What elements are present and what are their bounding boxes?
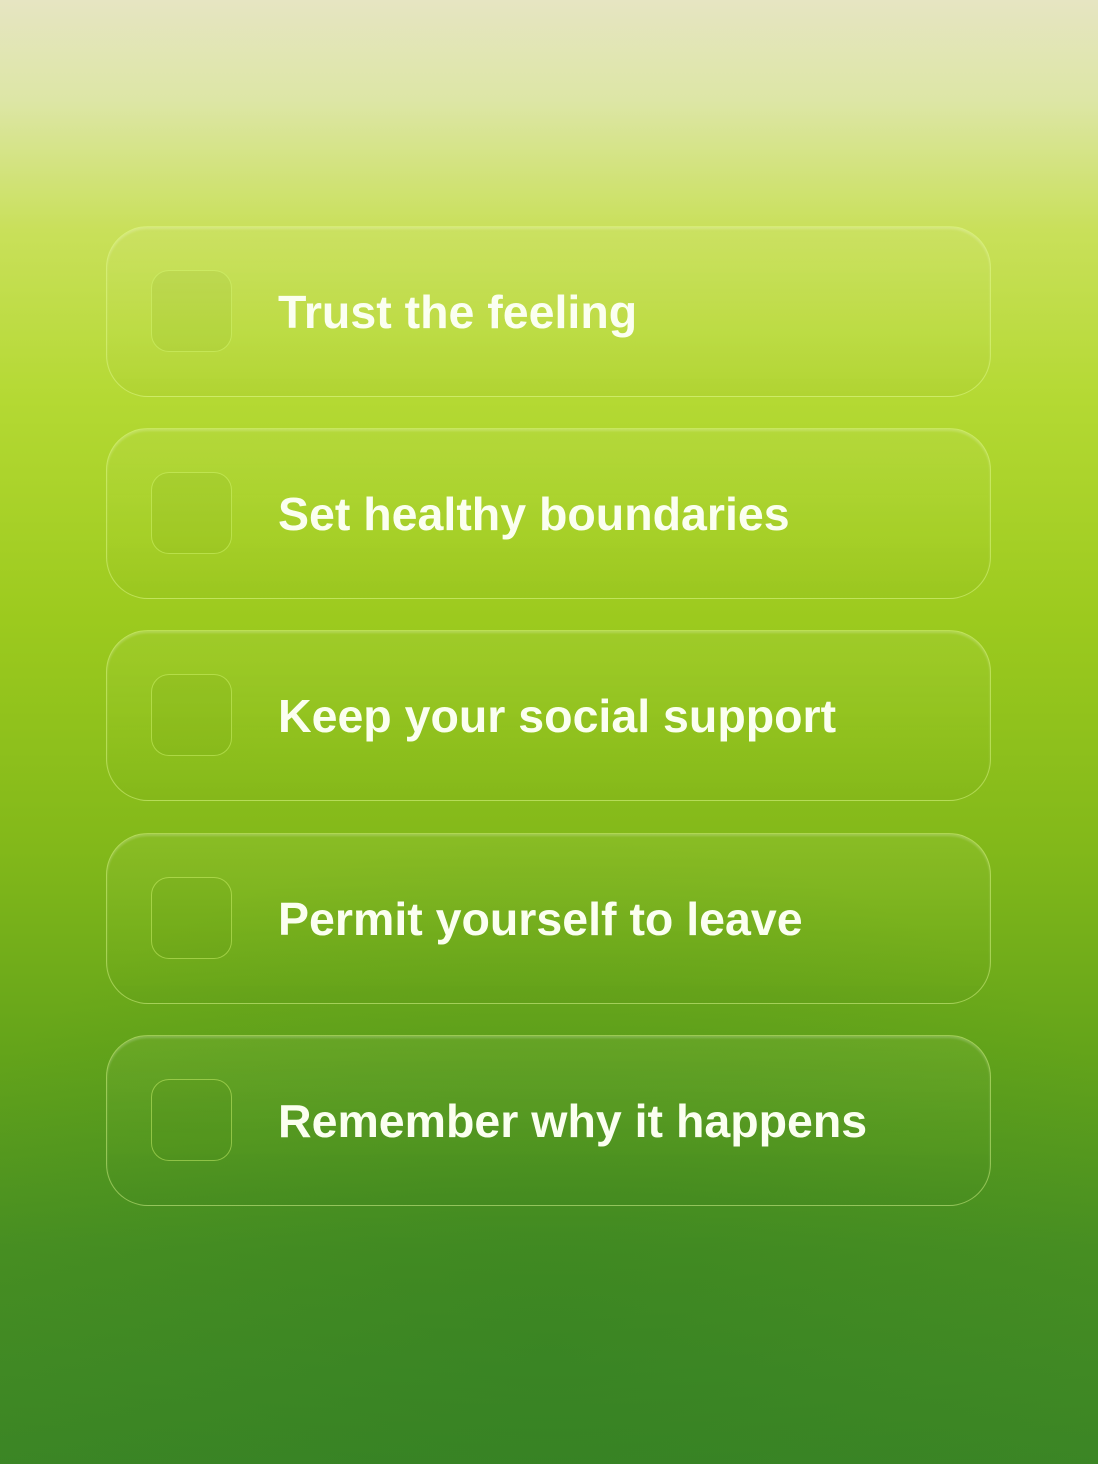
text: trust the feeling: Trust the feeling <box>278 286 637 338</box>
card: set healthy boundaries <box>106 428 991 599</box>
text: set healthy boundaries: Set healthy boundaries <box>278 488 790 540</box>
card: keep your social support <box>106 630 991 801</box>
checkbox <box>151 877 232 959</box>
text: permit yourself to leave: Permit yourself to leave <box>278 893 803 945</box>
checkbox <box>151 1079 232 1161</box>
text: keep your social support: Keep your social support <box>278 690 836 742</box>
card: remember why it happens <box>106 1035 991 1206</box>
checkbox <box>151 270 232 352</box>
card: permit yourself to leave <box>106 833 991 1004</box>
checkbox <box>151 674 232 756</box>
checkbox <box>151 472 232 554</box>
text: remember why it happens: Remember why it happens <box>278 1095 867 1147</box>
card: trust the feeling <box>106 226 991 397</box>
